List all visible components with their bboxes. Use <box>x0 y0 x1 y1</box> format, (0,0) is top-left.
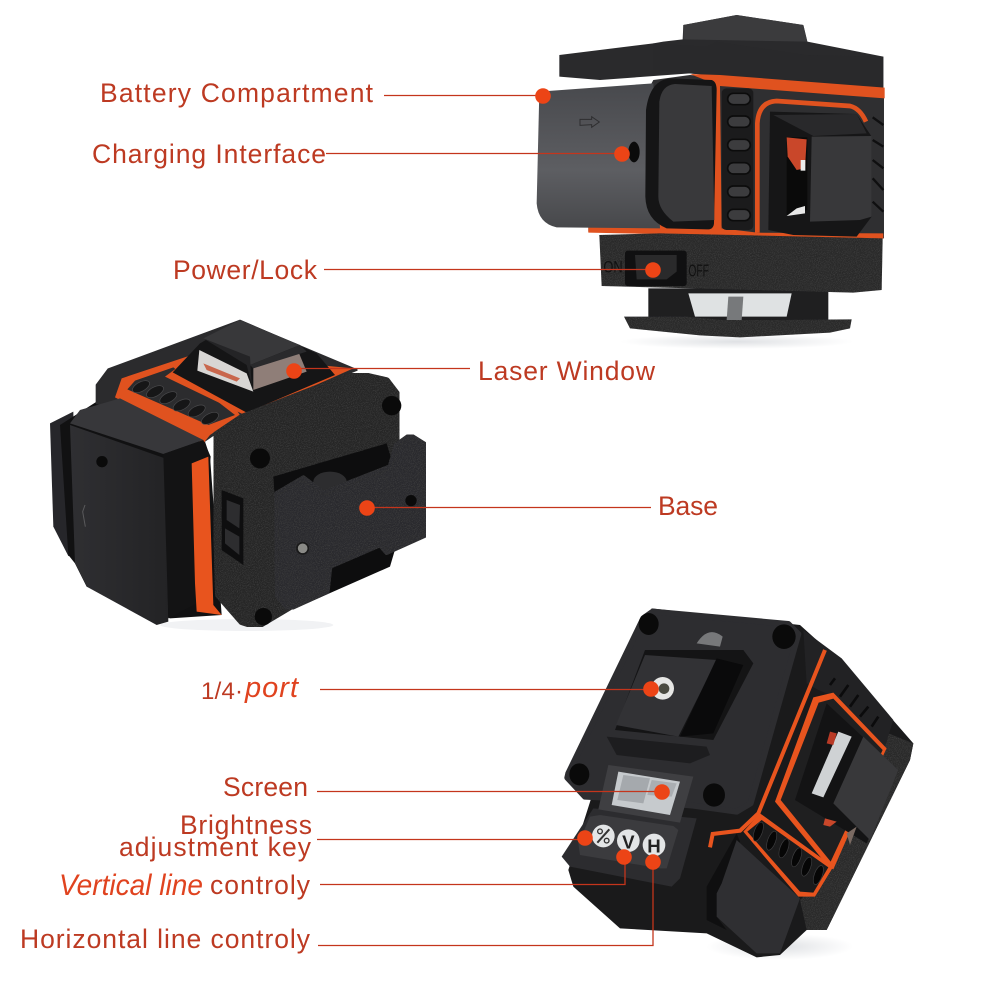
control buttons <box>578 815 678 868</box>
oval column <box>743 813 833 897</box>
quarter inch mount <box>607 650 753 763</box>
label: Charging Interface: Charging Interface <box>92 139 326 169</box>
ridged side <box>803 630 893 747</box>
mounts and holes <box>569 613 796 807</box>
label: Power/Lock: Power/Lock <box>173 255 318 285</box>
device: bottom laser level, control panel view <box>562 608 913 960</box>
power switch: OFF <box>688 261 709 281</box>
label: controly: controly <box>210 870 311 900</box>
battery <box>537 78 717 229</box>
recess <box>273 443 407 603</box>
body <box>588 75 884 238</box>
label: Base: Base <box>658 491 718 521</box>
ridges <box>873 117 883 212</box>
power switch <box>603 251 709 286</box>
top housing <box>559 15 883 88</box>
textured body <box>214 373 399 627</box>
label: adjustment key: adjustment key <box>119 832 312 862</box>
top surface <box>97 321 357 442</box>
body silhouette <box>568 608 913 957</box>
battery <box>707 833 800 953</box>
laser window mount <box>165 320 353 416</box>
foot and stand <box>624 288 852 337</box>
front plate <box>567 612 798 812</box>
label: Battery Compartment: Battery Compartment <box>100 78 374 108</box>
side switch <box>222 490 243 565</box>
label: Laser Window: Laser Window <box>478 356 656 386</box>
control buttons: V <box>622 831 635 852</box>
textured right side <box>800 733 913 930</box>
button panel plate <box>562 808 697 887</box>
laser window <box>775 693 898 869</box>
ovals <box>131 378 220 427</box>
LCD screen <box>598 765 693 823</box>
label: 1/4 port: 1/4· <box>201 678 243 705</box>
marker dots <box>286 88 670 870</box>
power switch: ON <box>603 258 623 277</box>
left backing <box>60 402 222 618</box>
label: Horizontal line controly: Horizontal line controly <box>20 924 311 954</box>
device: top laser level, side view <box>537 15 885 349</box>
laser window <box>757 101 872 237</box>
mount holes <box>250 396 417 625</box>
device: middle laser level, three-quarter view <box>50 320 426 631</box>
label: Screen: Screen <box>223 772 308 802</box>
rear battery flap <box>50 412 76 557</box>
orange band <box>588 74 885 239</box>
orange seam <box>710 650 825 847</box>
base block <box>599 233 883 293</box>
base plate <box>275 435 426 609</box>
control buttons: H <box>647 835 661 856</box>
battery block <box>70 398 211 625</box>
oval button column <box>722 88 753 230</box>
label: Brightness: Brightness <box>180 810 312 840</box>
label: port italic: port <box>244 672 300 704</box>
leader lines <box>296 96 662 946</box>
orange strip <box>192 457 222 615</box>
label: Vertical line: Vertical line <box>59 869 203 902</box>
